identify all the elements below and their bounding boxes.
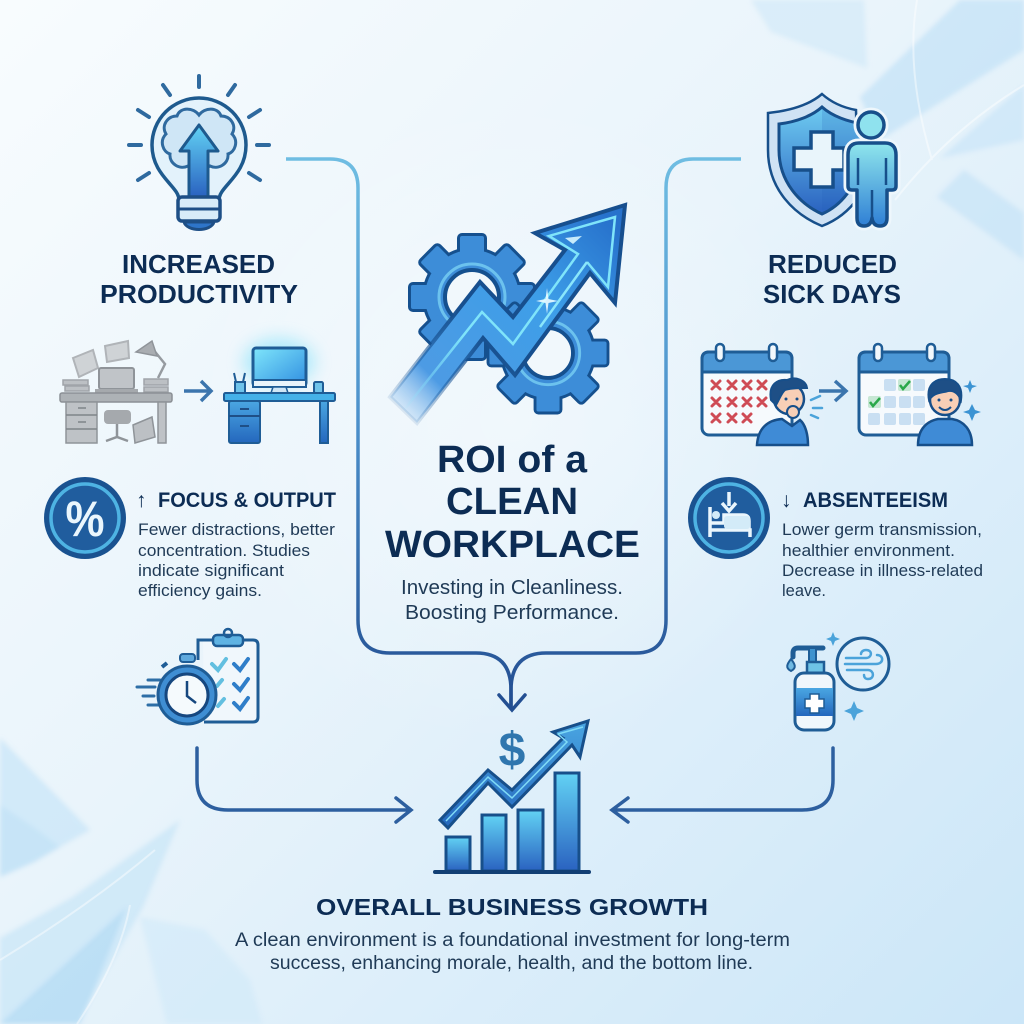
panel: overall business growth <box>235 721 790 974</box>
panel: reduced sick days <box>688 94 983 730</box>
connector: bottom left <box>197 748 411 822</box>
arrowhead: down into growth chart <box>499 695 525 710</box>
heading: increased productivity: PRODUCTIVITY <box>100 281 298 309</box>
heading: reduced sick days <box>763 251 901 309</box>
text: growth summary: success, enhancing morale, health, and the bottom line. <box>270 953 753 974</box>
arrow: messy to clean desk <box>184 381 211 401</box>
icon: growth bar chart <box>435 721 589 872</box>
icon: smiling man <box>918 379 981 445</box>
icon: healthy calendar with checks <box>859 344 949 435</box>
title: ROI of a clean workplace <box>385 439 640 566</box>
arrow: sick to healthy calendar <box>819 381 846 401</box>
icon: gears with rising arrow <box>390 205 625 423</box>
panel: center title <box>385 205 640 624</box>
text: absenteeism: healthier environment. <box>782 541 955 560</box>
subtitle: Boosting Performance. <box>405 602 619 624</box>
connector: bottom right <box>612 748 833 822</box>
text: absenteeism: Lower germ transmission, <box>782 520 982 539</box>
text: focus and output: efficiency gains. <box>138 581 262 600</box>
icon: light bulb with brain and arrow <box>129 76 269 230</box>
icon: percent badge <box>44 477 126 559</box>
heading: reduced sick days: SICK DAYS <box>763 281 901 309</box>
icon: bed badge <box>688 477 770 559</box>
text: focus and output: concentration. Studies <box>138 541 310 560</box>
icon: clean desk with monitor <box>224 338 335 443</box>
icon: percent badge: % <box>66 491 104 547</box>
panel: increased productivity <box>44 76 336 724</box>
icon: messy desk <box>60 341 172 443</box>
text: growth summary: A clean environment is a foundational investment for long-term <box>235 930 790 951</box>
subtitle <box>401 577 623 624</box>
title: ROI of a clean workplace: ROI of a <box>437 439 588 481</box>
text: absenteeism: Decrease in illness-related <box>782 561 983 580</box>
heading: overall business growth: OVERALL BUSINESS GROWTH <box>316 894 708 920</box>
heading: reduced sick days: REDUCED <box>768 251 897 279</box>
icon: sanitizer and airflow <box>787 632 889 730</box>
title: ROI of a clean workplace: WORKPLACE <box>385 524 640 566</box>
text: focus and output: ↑ <box>136 489 146 512</box>
text: growth summary <box>235 930 790 974</box>
connector: sick days to growth <box>511 159 741 708</box>
text: absenteeism: ↓ <box>781 489 792 512</box>
connector: productivity to growth <box>286 159 511 708</box>
text: focus and output <box>136 489 336 600</box>
heading: increased productivity <box>100 251 298 309</box>
text: absenteeism <box>781 489 983 600</box>
text: focus and output: Fewer distractions, better <box>138 520 335 539</box>
heading: increased productivity: INCREASED <box>122 251 275 279</box>
icon: coughing man <box>757 378 822 445</box>
text: focus and output: FOCUS & OUTPUT <box>158 489 336 512</box>
text: focus and output: indicate significant <box>138 561 284 580</box>
icon: stopwatch and checklist <box>137 629 258 724</box>
text: absenteeism: ABSENTEEISM <box>803 489 948 512</box>
icon: sick calendar with red crosses <box>702 344 792 435</box>
icon: shield with person <box>768 94 896 226</box>
icon: growth bar chart: $ <box>499 724 526 777</box>
title: ROI of a clean workplace: CLEAN <box>446 481 578 523</box>
text: absenteeism: leave. <box>782 581 826 600</box>
subtitle: Investing in Cleanliness. <box>401 577 623 599</box>
